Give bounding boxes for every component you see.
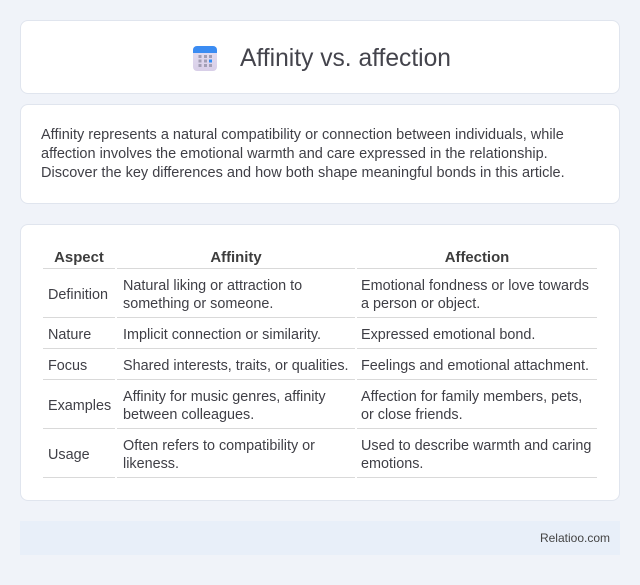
icon: calendar: [193, 46, 217, 71]
table: Affinity for music genres, affinity: [123, 389, 326, 405]
table: Used to describe warmth and caring: [361, 438, 591, 454]
row: Focus: Focus: [48, 358, 87, 374]
table: or close friends.: [361, 407, 463, 423]
table: emotions.: [361, 456, 423, 472]
table: Feelings and emotional attachment.: [361, 358, 589, 374]
row: Examples: Examples: [48, 398, 111, 414]
table card: [20, 224, 620, 501]
table: between colleagues.: [123, 407, 254, 423]
footer text: Relatioo.com: [540, 531, 610, 545]
title card: [20, 20, 620, 94]
row: Usage: Usage: [48, 447, 90, 463]
table: Expressed emotional bond.: [361, 327, 535, 343]
row: Definition: Definition: [48, 287, 108, 303]
intro text: affection involves the emotional warmth and care expressed in the relationship.: [41, 146, 548, 162]
title: Affinity vs. affection: [240, 45, 451, 72]
intro card: [20, 104, 620, 204]
table: Emotional fondness or love towards: [361, 278, 589, 294]
intro text: Affinity represents a natural compatibility or connection between individuals, while: [41, 126, 564, 142]
header: Affinity: Affinity: [210, 250, 262, 266]
header: Aspect: Aspect: [54, 250, 104, 266]
table: Affection for family members, pets,: [361, 389, 582, 405]
table: [43, 250, 597, 478]
intro text: Discover the key differences and how both shape meaningful bonds in this article.: [41, 165, 565, 181]
table: likeness.: [123, 456, 179, 472]
table: a person or object.: [361, 296, 480, 312]
header: Affection: Affection: [445, 250, 509, 266]
intro text: [41, 126, 565, 181]
table: Shared interests, traits, or qualities.: [123, 358, 349, 374]
row: Nature: Nature: [48, 327, 91, 343]
footer bar: [20, 521, 620, 555]
table: Natural liking or attraction to: [123, 278, 302, 294]
table: Often refers to compatibility or: [123, 438, 315, 454]
table: Implicit connection or similarity.: [123, 327, 321, 343]
table: something or someone.: [123, 296, 273, 312]
